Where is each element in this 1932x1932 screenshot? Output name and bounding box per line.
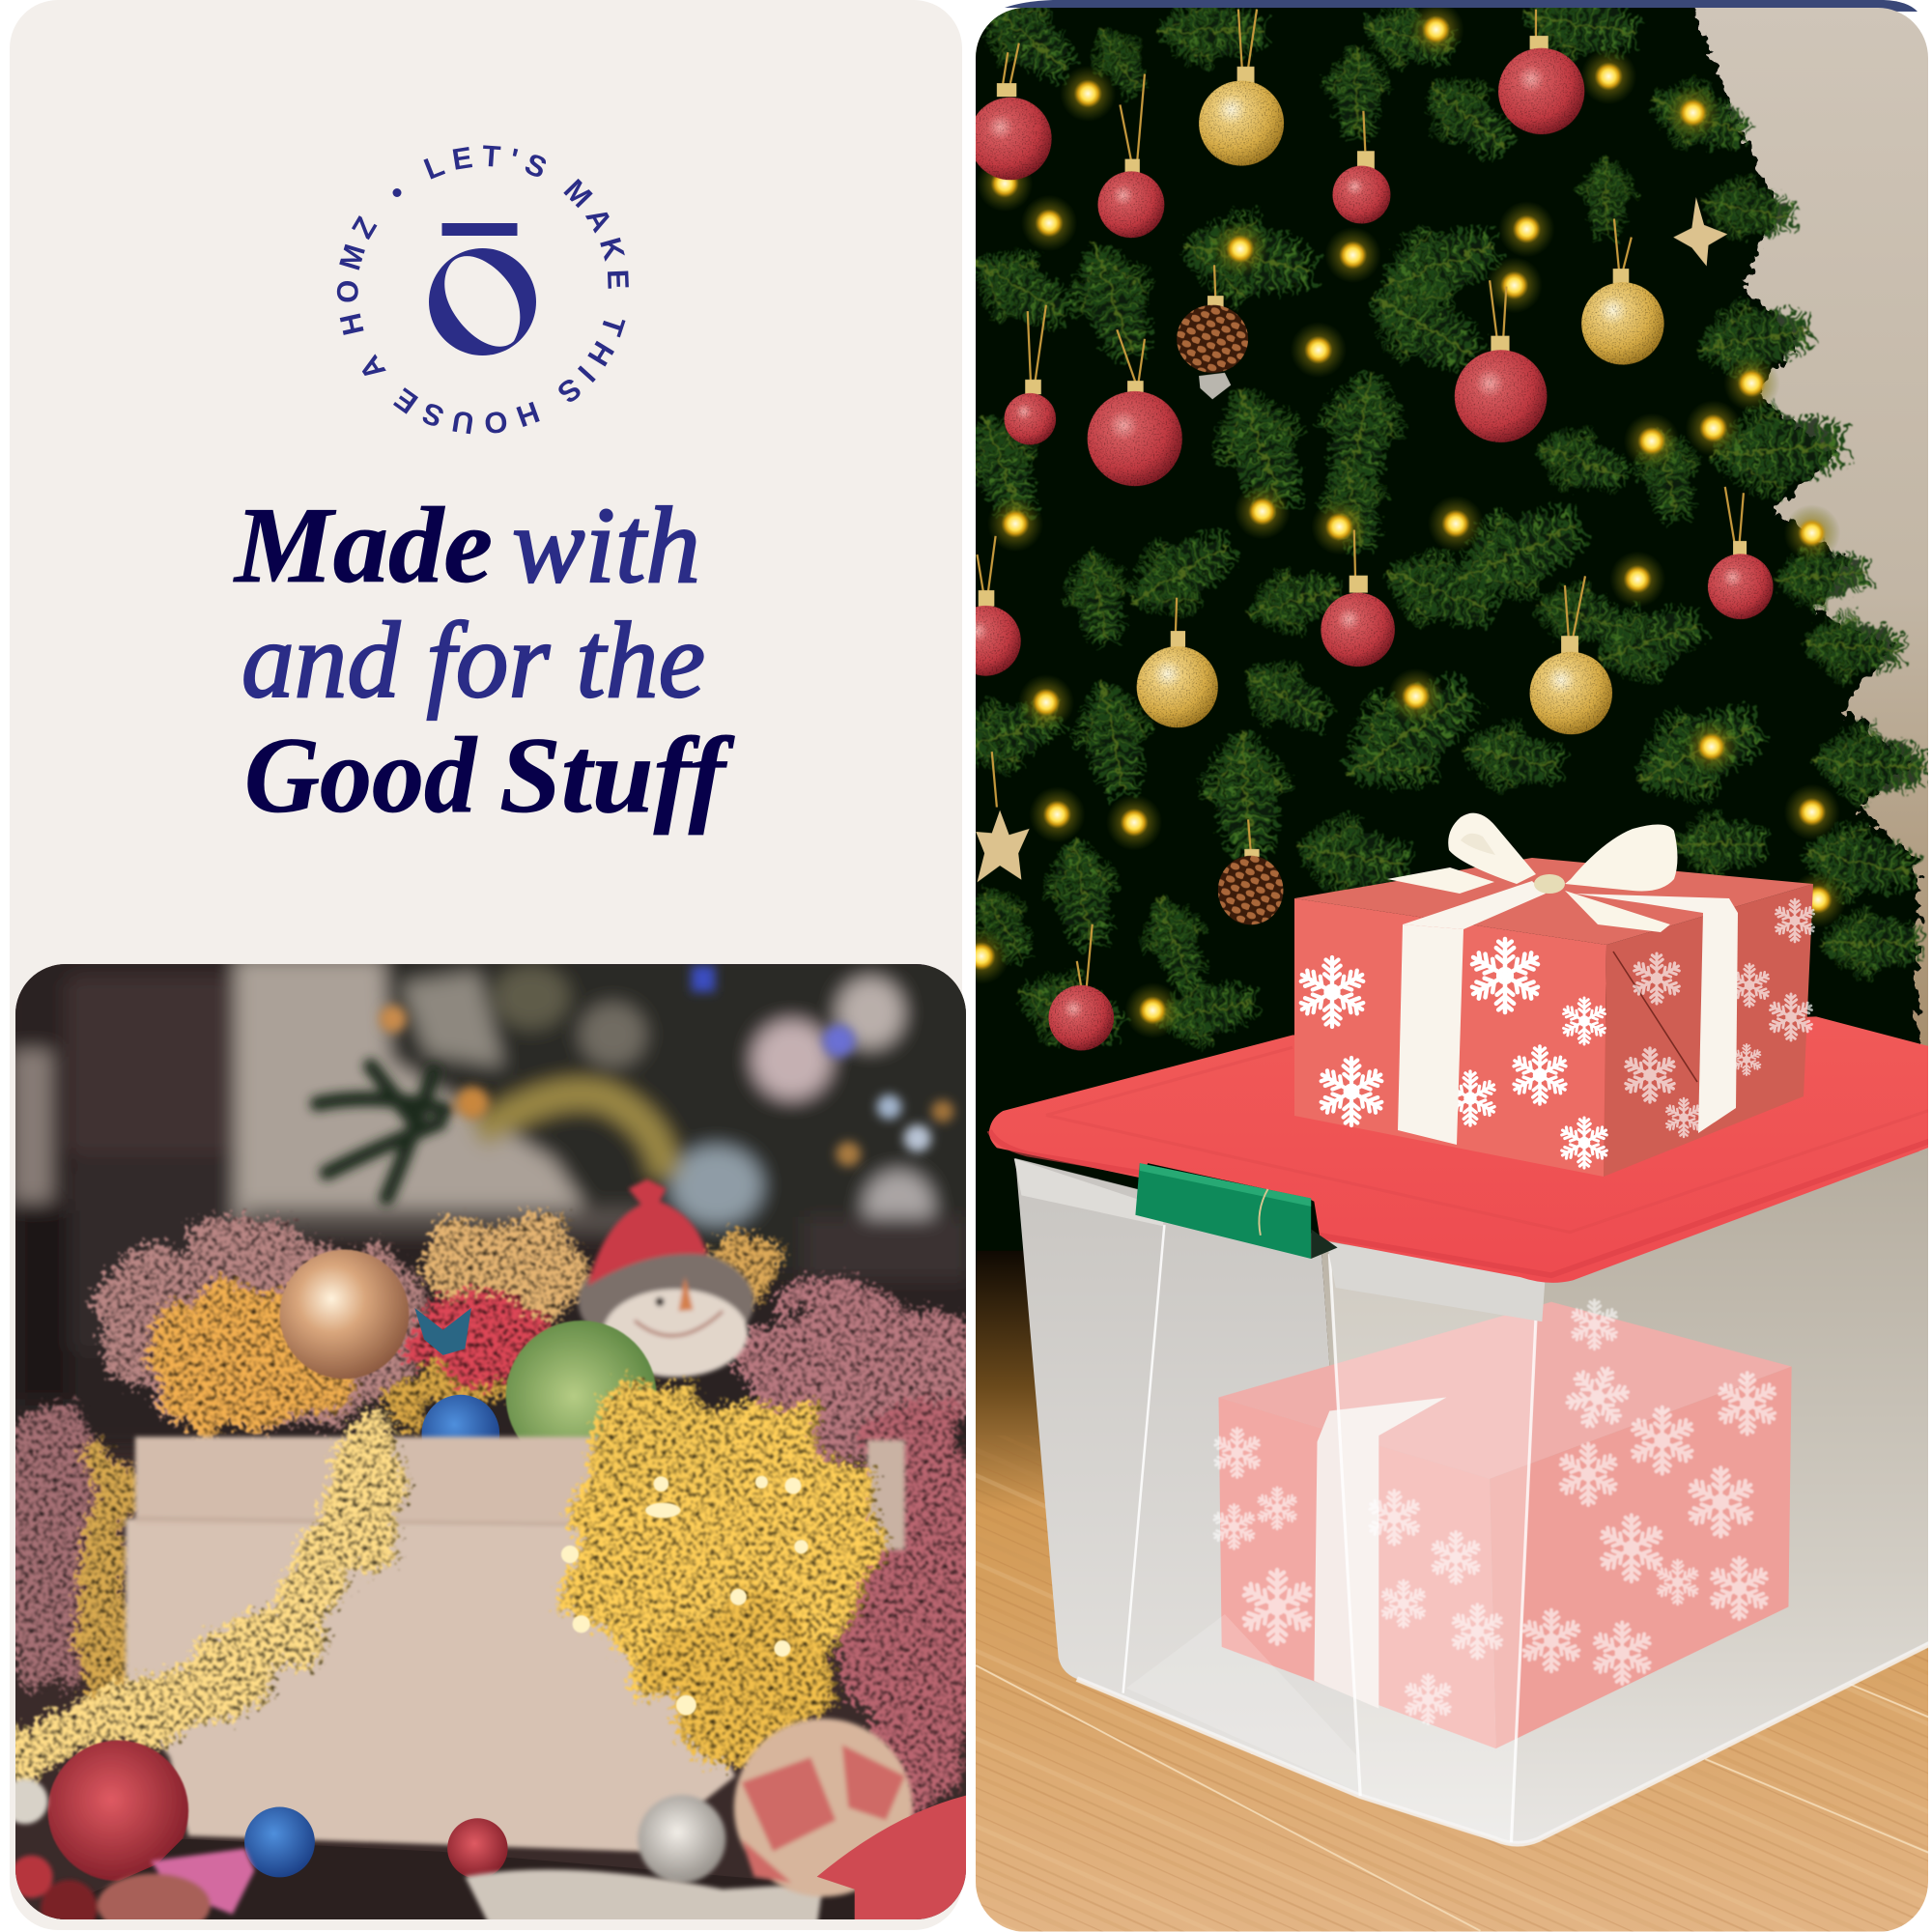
- cardboard box: [126, 1436, 905, 1852]
- bin floor light: [1126, 1614, 1360, 1793]
- gift left face: [1294, 898, 1606, 1177]
- photo: Christmas tree with gifts and storage bin: [937, 0, 1932, 1932]
- headline line 2: and for the: [242, 601, 705, 721]
- snowman ornament: [578, 1179, 754, 1378]
- ornament: blue ball: [244, 1807, 315, 1877]
- ornament hangers: [977, 10, 1744, 998]
- logo mark: o with macron: [429, 223, 536, 355]
- ornament: silver ball: [638, 1795, 725, 1883]
- pink gift top: [1218, 1302, 1792, 1479]
- bow knot: [1534, 874, 1565, 894]
- photo: box of Christmas tinsel and ornaments: [0, 947, 1006, 1932]
- green latch: [1135, 1163, 1338, 1259]
- lid front lip shadow: [989, 1130, 1932, 1275]
- floor: [966, 1251, 1932, 1932]
- blurred room background: [0, 947, 1006, 1449]
- ornament: silver tray: [465, 1869, 823, 1927]
- bow left tail: [1387, 867, 1494, 894]
- bin rim under lid, right of latch: [1326, 1241, 1546, 1321]
- star ornaments: [976, 197, 1727, 882]
- headline line 3: Good: [244, 716, 478, 836]
- gift wrap fold: [1613, 952, 1697, 1082]
- snowman fur hat: [576, 1251, 756, 1325]
- bottom dark table: [0, 1839, 880, 1932]
- ornaments bottom left cluster: [3, 1778, 254, 1932]
- logo ring text: LET'S MAKE THIS HOUSE A HOMZ: [336, 145, 629, 435]
- red baubles: [951, 48, 1774, 1050]
- tinsel sparkle highlights: [561, 1476, 809, 1716]
- bin rim under lid, left of latch: [1014, 1158, 1163, 1226]
- tree branches: [937, 0, 1932, 1072]
- bin right face: [1321, 1146, 1932, 1844]
- ornament: blue ball behind: [421, 1395, 500, 1440]
- ornament: blue butterfly: [414, 1308, 471, 1355]
- gift ribbons: [1398, 881, 1738, 1145]
- photo base fill: [13, 959, 971, 1924]
- bin red lid: [989, 1016, 1932, 1283]
- bow right loop: [1565, 824, 1677, 891]
- gift snowflakes: [1298, 899, 1816, 1168]
- latch clip wire: [1259, 1189, 1268, 1236]
- headline line 1: Made: [233, 486, 493, 606]
- pink gift ribbon: [1314, 1398, 1446, 1709]
- headline line 3: Stuff: [499, 716, 735, 836]
- headline: [233, 486, 735, 836]
- pink gift left face: [1218, 1398, 1496, 1748]
- red and silver tinsel, top: [0, 1220, 990, 1807]
- bow inner shadow: [1461, 834, 1495, 855]
- fairy lights: [953, 1, 1846, 1038]
- panel: cream brand panel: [10, 0, 962, 1930]
- gold tinsel strands: [19, 1386, 873, 1757]
- ornament caps: [979, 36, 1747, 1008]
- snowman red hat: [587, 1179, 707, 1286]
- gold tinsel cluster behind ornaments: [78, 1213, 785, 1714]
- snowman face: [603, 1290, 748, 1378]
- gift right face: [1604, 884, 1813, 1177]
- gift bow: [1387, 813, 1677, 932]
- latch highlight: [1140, 1163, 1311, 1207]
- circular logo badge: [336, 145, 629, 435]
- pink gift right face: [1490, 1367, 1792, 1748]
- headline line 3: [244, 716, 735, 836]
- pinecone ornaments: [1177, 305, 1283, 924]
- bin left face: [1015, 1158, 1360, 1796]
- background details: [318, 966, 953, 1198]
- tree silhouette: [966, 0, 1918, 1306]
- ornament: green ball: [506, 1321, 657, 1471]
- top navy strip behind the right photo: [1005, 0, 1918, 12]
- lid surface: [989, 1016, 1932, 1283]
- bin bottom edge: [1077, 1642, 1932, 1844]
- bin front corner lines: [1329, 1254, 1536, 1842]
- latch body: [1135, 1163, 1311, 1259]
- bow right tail: [1565, 891, 1670, 932]
- ornament: peach ball: [279, 1250, 409, 1379]
- lid recess shading: [1046, 1047, 1932, 1233]
- wall: [976, 8, 1932, 1070]
- red wrapped gift on lid: [1294, 813, 1816, 1177]
- storage bin body: [1014, 1146, 1932, 1845]
- bin left pane highlight: [1123, 1225, 1164, 1693]
- bow left loop: [1448, 813, 1536, 884]
- headline line 1: with: [512, 486, 700, 606]
- bin translucent frost over gift: [1329, 1254, 1536, 1845]
- ornament: small red ball: [447, 1818, 508, 1879]
- pink gift snowflakes: [1212, 1300, 1777, 1724]
- latch end shadow: [1311, 1229, 1338, 1259]
- headline line 1: [233, 486, 700, 606]
- gold baubles: [1137, 81, 1664, 734]
- red gift bottom right: [817, 1795, 968, 1927]
- gift top face: [1294, 858, 1813, 945]
- pink gift inside the bin: [1212, 1300, 1792, 1748]
- ornament: red ball bottom left: [47, 1741, 188, 1881]
- ornament: patterned ball: [734, 1719, 913, 1897]
